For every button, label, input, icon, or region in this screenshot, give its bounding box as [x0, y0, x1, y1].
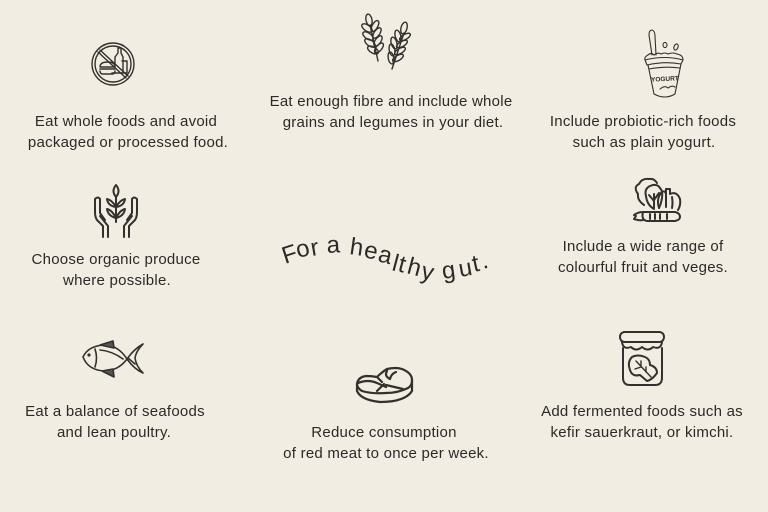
- panel: organic: [32, 185, 200, 289]
- text: whole foods: packaged or processed food.: [28, 134, 228, 151]
- text: probiotic: such as plain yogurt.: [573, 134, 715, 151]
- text: fruit and veges: colourful fruit and veges.: [558, 259, 728, 276]
- icon: steak: [357, 368, 412, 402]
- icon: no processed food: [92, 43, 134, 85]
- icon: wheat stalks: [360, 14, 411, 69]
- label: yogurt pot label: YOGURT: [651, 75, 679, 84]
- icon: yogurt pot: [645, 30, 683, 97]
- text: fibre: Eat enough fibre and include whole: [270, 93, 512, 110]
- text: organic: where possible.: [62, 272, 171, 289]
- text: fermented: Add fermented foods such as: [541, 403, 743, 420]
- text: fibre: grains and legumes in your diet.: [283, 114, 503, 131]
- text: whole foods: Eat whole foods and avoid: [35, 113, 217, 130]
- text: fermented: kefir sauerkraut, or kimchi.: [551, 424, 733, 441]
- title: For a healthy gut: For a healthy gut.: [279, 231, 491, 287]
- panel: whole foods: [28, 43, 228, 151]
- panel: fermented: [541, 332, 743, 441]
- panel: fruit and veges: [558, 179, 728, 276]
- icon: fish: [83, 341, 143, 377]
- icon: fermented jar: [620, 332, 664, 385]
- text: red meat: of red meat to once per week.: [283, 445, 489, 462]
- text: fruit and veges: Include a wide range of: [563, 238, 724, 255]
- text: seafood: Eat a balance of seafoods: [25, 403, 205, 420]
- text: probiotic: Include probiotic-rich foods: [550, 113, 736, 130]
- text: organic: Choose organic produce: [32, 251, 200, 268]
- icon: hands holding wheat: [95, 185, 137, 237]
- panel: probiotic: [550, 30, 736, 151]
- panel: red meat: [283, 368, 489, 462]
- panel: seafood: [25, 341, 205, 441]
- panel: fibre: [270, 14, 512, 131]
- text: seafood: and lean poultry.: [57, 424, 171, 441]
- icon: vegetables: [634, 179, 680, 221]
- text: red meat: Reduce consumption: [311, 424, 457, 441]
